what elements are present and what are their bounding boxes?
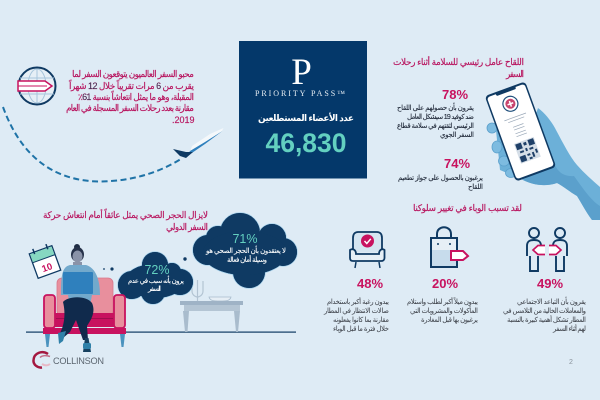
illustration: side table — [180, 280, 243, 332]
stat: 48 percent: يبدون رغبة أكبر باستخدام — [327, 297, 389, 306]
logo: collinson — [33, 352, 104, 368]
cloud: 72 percent: السفر — [147, 286, 161, 293]
icon: armchair with check — [350, 232, 384, 268]
cloud: 71 percent: لا يعتقدون بأن الحجر الصحي هو — [205, 245, 286, 255]
cloud text: 71% — [232, 232, 258, 246]
page number: 2 — [569, 359, 573, 366]
cloud text: 72% — [144, 263, 170, 277]
qr code — [514, 137, 541, 164]
panel: priority pass members — [239, 41, 367, 178]
heading: vaccine: اللقاح عامل رئيسي للسلامة أثناء رحلات — [393, 56, 524, 67]
stat: 49 percent: المطار تشكل أهمية كبيرة بالنسبة — [507, 315, 586, 324]
stat: 48 percent: خلال فترة ما قبل الوباء — [333, 326, 389, 333]
illustration: calendar — [28, 242, 61, 278]
person — [58, 244, 100, 352]
illustration: person on sofa with laptop — [43, 244, 126, 352]
stat: 20 percent: المأكولات والمشروبات التي — [410, 305, 478, 315]
heading: quarantine — [43, 208, 208, 232]
stat: 78 percent: 78% — [442, 87, 468, 102]
stat: 20 percent: 20% — [432, 276, 458, 291]
laptop — [63, 272, 93, 294]
stat: 48 percent: صالات الانتظار في المطار — [323, 308, 389, 315]
logo wordmark: PRIORITY PASS™ — [255, 89, 345, 98]
stat: 20 percent: يبدون ميلاً أكبر لطلب واستلام — [407, 297, 478, 306]
icon: shopping bag — [431, 227, 468, 267]
certificate lines — [504, 113, 533, 139]
text block: travel forecast: .2019 — [172, 115, 195, 125]
stat: 20 percent: يرغبون بها قبل المغادرة — [421, 317, 478, 324]
stat: 49 percent: 49% — [537, 276, 563, 291]
logo: collinson: COLLINSON — [53, 356, 104, 366]
text block: travel forecast: مقارنة بعدد رحلات السفر المسجلة في العام — [66, 103, 194, 113]
stat: 78 percent: السفر الجوي — [440, 132, 474, 139]
hand — [496, 108, 600, 220]
icon: people with arrows — [527, 228, 567, 271]
icon: airplane — [173, 128, 224, 158]
logo: priority pass P: P — [291, 52, 312, 93]
stat: 74 percent: يرغبون بالحصول على جواز تطعيم — [398, 175, 483, 182]
heading: quarantine: لايزال الحجر الصحي يمثل عائقاً أمام انتعاش حركة — [43, 208, 208, 220]
heading: vaccine: السفر — [505, 69, 524, 79]
ground line — [26, 332, 296, 333]
stat: 49 percent: يقرون بأن التباعد الاجتماعي — [517, 296, 586, 306]
members label: عدد الأعضاء المستطلعين — [258, 112, 354, 124]
cloud: 72 percent — [118, 252, 193, 304]
stat: 49 percent: والمعاملات الخالية من التلامس في — [503, 308, 586, 315]
heading: vaccine — [393, 56, 524, 79]
stat: 49 percent — [503, 276, 586, 333]
icon: globe with arrow — [18, 68, 56, 104]
thought dots — [103, 257, 187, 271]
stat: 78 percent: الرئيسي لثقتهم في سلامة قطاع — [397, 123, 474, 130]
stat: 49 percent: لهم أثناء السفر — [552, 324, 586, 333]
phone — [485, 81, 556, 182]
text block: travel forecast — [66, 69, 195, 125]
stat: 78 percent: ضد كوفيد 19 سيشكل العامل — [407, 113, 474, 121]
stat: 48 percent — [323, 276, 389, 333]
dashed flight path — [3, 107, 181, 182]
sofa — [43, 278, 126, 347]
cloud: 71 percent — [193, 213, 297, 288]
cloud: 71 percent: وسيلة أمان فعالة — [227, 255, 267, 264]
stat: 78 percent — [397, 87, 474, 139]
text block: travel forecast: محبو السفر العالميون يتوقعون السفر لما — [72, 69, 194, 79]
stat: 48 percent: مقارنة بما كانوا يفعلونه — [333, 316, 389, 324]
heading: quarantine: السفر الدولي — [166, 222, 208, 232]
stat: 78 percent: يقرون بأن حصولهم على اللقاح — [397, 102, 474, 112]
stat: 74 percent — [398, 156, 483, 191]
cloud: 72 percent: يرون بأنه سبب في عدم — [128, 275, 184, 285]
illustration: calendar: 10 — [40, 261, 54, 275]
stat: 48 percent: 48% — [357, 276, 383, 291]
stat: 74 percent: اللقاح — [468, 184, 483, 191]
illustration: hand holding phone — [485, 81, 600, 220]
text block: travel forecast: المقبلة، وهو ما يمثل انتعاشاً بنسبة 61٪ — [78, 90, 194, 102]
heading: behaviour change: لقد تسبب الوباء في تغيير سلوكنا — [413, 203, 522, 213]
text block: travel forecast: يقرب من 6 مرات تقريباً خلال 12 شهراً — [68, 79, 194, 91]
fingers — [487, 123, 516, 178]
stat: 20 percent — [407, 276, 478, 324]
stat: 74 percent: 74% — [444, 156, 470, 171]
vaccine seal — [501, 94, 520, 113]
members number: 46,830 — [265, 128, 347, 158]
